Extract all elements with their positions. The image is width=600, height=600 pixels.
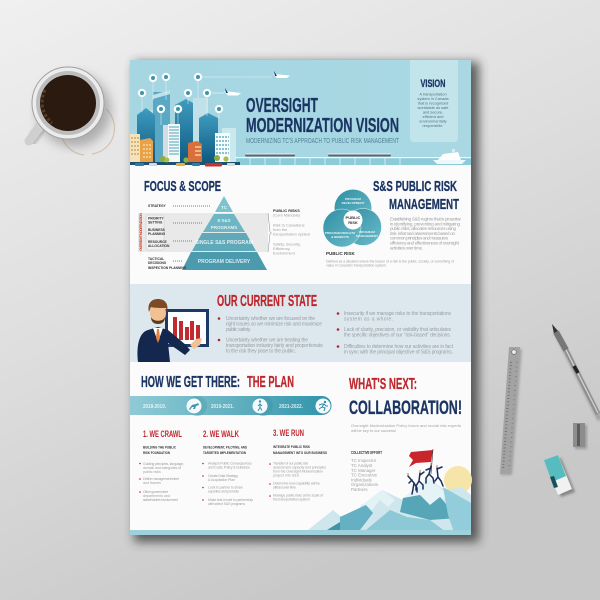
timeline: 2021-2022. — [279, 404, 303, 410]
bullets: current state left — [218, 316, 323, 354]
illustration: elevated rail bridge — [235, 154, 471, 165]
pyramid chart: 8 S&S — [217, 218, 231, 223]
labels: governance levels: ALLOCATION — [148, 244, 170, 248]
text: public risk definition: Defined as a situation where the bearer of a risk is the public, society, or something of — [326, 260, 454, 264]
labels: governance levels: PLANNING — [148, 232, 166, 236]
column: we walk: TARGETED IMPLEMENTATION — [203, 450, 246, 455]
panel: vision — [410, 60, 458, 142]
column: we crawl: Other government — [143, 490, 168, 494]
text: vision statement: system in Canada — [417, 96, 449, 101]
bracket — [268, 213, 272, 252]
labels: governance levels: RESOURCE — [148, 240, 167, 244]
icon: airplane lower — [212, 88, 241, 96]
icon: crawl — [186, 396, 207, 416]
heading: vision: VISION — [420, 78, 446, 90]
text: collective effort: Individuals — [351, 477, 373, 482]
text: regime description: common principles and measures — [390, 236, 449, 241]
pyramid chart — [182, 196, 267, 270]
text: public risk definition — [326, 251, 454, 268]
venn diagram: PROGRAM — [359, 230, 375, 234]
arrows: dashed connectors — [173, 206, 210, 261]
subtitle: MODERNIZING TC'S APPROACH TO PUBLIC RISK MANAGEMENT — [246, 136, 399, 145]
heading: s&s public risk management: S&S PUBLIC RISK — [373, 178, 457, 195]
column: we walk: Make test model in partnership — [208, 498, 253, 502]
climbers — [407, 463, 443, 494]
column: we run: Manage public risks at the scale of — [273, 494, 323, 498]
bullets: current state left: Uncertainty whether we are treating the — [226, 338, 308, 344]
text: vision statement: responsible. — [423, 123, 443, 128]
band: oversight scope — [138, 213, 268, 252]
text: vision statement: worldwide as safe — [418, 105, 448, 110]
bullets: current state right: system as a whole. — [344, 316, 393, 322]
column: we run: MANAGEMENT INTO OUR BUSINESS — [273, 450, 327, 455]
heading: what's next: WHAT'S NEXT: — [349, 376, 417, 393]
labels: governance levels — [146, 204, 187, 270]
title: OVERSIGHT — [246, 95, 318, 117]
poster shadow — [134, 62, 479, 542]
bullets: current state right — [337, 311, 454, 356]
labels: governance levels: STRATEGY — [148, 204, 167, 208]
labels: governance levels: PRIORITY — [148, 216, 164, 220]
flag — [409, 449, 433, 474]
text: collective effort — [351, 450, 382, 492]
text: vision statement: that is recognized — [418, 100, 448, 106]
bullets: current state left: Uncertainty whether we are focused on the — [226, 316, 315, 322]
object: sharpener — [573, 423, 587, 449]
text: regime description: Establishing S&S regime that is proactive — [390, 216, 461, 222]
heading: how we get there: HOW WE GET THERE: — [141, 374, 240, 391]
labels: governance levels: INSPECTION PLANNING — [148, 266, 187, 270]
illustration: presenter at board — [137, 299, 209, 362]
column: we walk: Analyze Public Consequences — [208, 462, 252, 466]
column: we crawl: Guiding principles, language, — [143, 462, 184, 466]
timeline — [130, 396, 332, 416]
venn diagram: DEVELOPMENT — [342, 201, 365, 205]
text: public risks: Environment — [273, 250, 296, 256]
column: we run: INTEGRATE PUBLIC RISK — [273, 444, 310, 449]
poster — [130, 60, 472, 535]
column: we crawl: domain and categories of — [143, 466, 181, 470]
vertical label: oversight modernization: OVERSIGHT MODERNIZATION — [139, 213, 143, 251]
venn diagram: RISK — [348, 220, 358, 225]
text: public risk definition: value in Canada's transportation system. — [326, 264, 387, 268]
icon network — [138, 73, 272, 125]
text: collective effort: Organizations — [351, 482, 379, 487]
icon: walk — [252, 396, 273, 416]
heading: s&s public risk management — [373, 178, 459, 213]
column: we run: the transportation system — [273, 498, 310, 502]
text: collective effort: TC Executive — [351, 473, 378, 478]
object: ruler — [500, 347, 522, 475]
bullets: current state left: transportation industry fairly and proportionate — [226, 343, 323, 349]
text: public risks: from the — [273, 227, 287, 232]
column: we run: Determine how capability will be — [273, 482, 320, 486]
column: we crawl: stakeholders involvement — [143, 498, 178, 502]
labels: governance levels: DECISIONS — [148, 261, 167, 265]
column: we run: project into S&S — [273, 474, 300, 478]
icon: ferry — [433, 149, 466, 164]
text: regime description: public risks; allocates resources using — [390, 226, 456, 231]
text: public risks: (Core Mandate) — [273, 212, 301, 218]
column: we walk: & Acquisition Plan — [208, 478, 235, 482]
bullets: current state right: in sync with the principal objective of S&S programs. — [344, 350, 453, 356]
panel: header banner — [130, 60, 471, 166]
panel: focus and scope — [138, 179, 310, 270]
text: forum note: will be key to our success! — [351, 428, 396, 433]
illustration: mountains and climbers — [308, 449, 472, 535]
venn diagram: PROGRAM — [345, 197, 361, 201]
text: regime description: activities over time. — [390, 245, 423, 250]
heading: collaboration: COLLABORATION! — [349, 398, 462, 419]
venn diagram — [323, 190, 382, 247]
bullets: current state left: public safety. — [226, 327, 251, 333]
labels: governance levels: BUSINESS — [148, 228, 166, 232]
column: we run: Transfer of our public risk — [273, 462, 308, 466]
column: we walk: expertise and promote — [208, 490, 239, 494]
text: regime description: efficiency and effectiveness of oversight — [390, 240, 460, 246]
text: vision statement: efficient and — [423, 114, 443, 119]
column: we run: 3. WE RUN — [273, 428, 304, 438]
column: we crawl: RISK FOUNDATION — [143, 450, 170, 455]
illustration: city skyline — [130, 73, 272, 166]
column: we walk: Look to partner to share — [208, 486, 243, 490]
venn diagram: PUBLIC — [346, 215, 361, 220]
panel: the plan — [130, 374, 332, 506]
column: we run — [269, 428, 327, 502]
column: we crawl — [139, 429, 184, 502]
column: we crawl: departments and — [143, 494, 170, 498]
venn diagram: PROGRAM RESULTS — [325, 231, 355, 235]
cars and trees — [135, 155, 235, 166]
object: coffee cup — [29, 67, 115, 155]
pyramid chart: SINGLE S&S PROGRAM — [195, 240, 253, 246]
pyramid chart: PROGRAM DELIVERY — [198, 259, 251, 265]
bullets: current state right: the specific objectives of our "risk-based" decisions. — [344, 332, 451, 338]
bullets: current state right: Difficulties to determine how our activities are in fact — [344, 344, 454, 350]
text: vision statement: environmentally — [419, 118, 447, 124]
icon: run — [316, 398, 330, 414]
text: vision statement: A transportation — [419, 92, 447, 96]
bullets: current state right: Lack of clarity, precision, or visibility that articulates — [344, 327, 452, 333]
venn diagram: & BENEFITS — [331, 235, 349, 239]
text: public risks: Risk to Canadians — [273, 222, 305, 228]
venn diagram: MANAGEMENT — [356, 234, 378, 238]
timeline: 2018-2019. — [143, 404, 166, 410]
pyramid chart: TC — [221, 205, 228, 210]
column: we run: from the Oversight Modernization — [273, 470, 323, 474]
text: public risks: PUBLIC RISKS — [273, 209, 300, 213]
bullets: current state left: right issues so we minimize risk and maximize — [226, 322, 322, 328]
icon: airplane top — [273, 71, 290, 78]
column: we crawl: Define management intent — [143, 477, 179, 481]
panel: our current state — [130, 284, 471, 362]
text: public risks: Safety, Security, — [273, 242, 301, 246]
column: we walk: 2. WE WALK — [203, 429, 239, 439]
text: public risk definition: PUBLIC RISK — [326, 251, 356, 256]
bullets: current state right: Insecurity if we manage risks to the transportations — [344, 311, 452, 317]
panel: what's next — [349, 376, 462, 492]
text: public risks: Efficiency, — [273, 246, 290, 251]
column: we walk: with select S&S programs — [208, 502, 245, 506]
text: vision statement: and secure, — [423, 110, 443, 114]
heading: how we get there: THE PLAN — [247, 374, 294, 391]
coffee stain ring — [61, 109, 115, 155]
column: we crawl: BUILDING THE PUBLIC — [143, 444, 176, 450]
title — [246, 95, 399, 145]
text: collective effort: COLLECTIVE EFFORT — [351, 450, 382, 455]
column: we crawl: public risks — [143, 470, 161, 474]
column: we walk — [202, 429, 253, 506]
column: we walk: DEVELOPMENT, PILOTING, AND — [203, 444, 247, 450]
object: eraser — [544, 455, 575, 497]
column: we run: utilized over time — [273, 486, 296, 490]
column: we walk: and Costs, Policy & Guidance — [208, 466, 250, 470]
title: MODERNIZATION VISION — [246, 115, 399, 137]
labels: governance levels: TACTICAL — [148, 257, 164, 261]
column: we crawl: and frames — [143, 481, 161, 485]
bullets: current state left: to the risk they pose to the public. — [226, 348, 296, 354]
column: we run: assessment capacity and principles — [273, 466, 326, 470]
text: regime description: in identifying, preventing and mitigating — [390, 221, 460, 226]
text: public risks: transportation system — [273, 232, 310, 236]
panel: s&s public risk management — [323, 178, 461, 268]
pyramid chart: PROGRAMS — [211, 225, 237, 230]
text: collective effort: TC Manager — [351, 468, 376, 473]
footer band — [130, 530, 471, 535]
text: regime description: risk- informed assessments based on — [390, 231, 455, 236]
text: collective effort: TC Analyst — [351, 463, 373, 468]
text: collective effort: TC Inspector — [351, 458, 377, 463]
text: forum note: Oversight Modernization Policy forum and modal risk experts — [351, 423, 461, 428]
text: collective effort: Partners — [351, 487, 368, 492]
heading: focus and scope: FOCUS & SCOPE — [144, 179, 221, 195]
column: we crawl: 1. WE CRAWL — [143, 429, 182, 439]
heading: s&s public risk management: MANAGEMENT — [389, 196, 459, 213]
object: pen — [552, 324, 600, 420]
heading: our current state: OUR CURRENT STATE — [217, 293, 317, 310]
labels: governance levels: SETTING — [148, 220, 163, 224]
column: we walk: Create Data Strategy — [208, 474, 238, 478]
timeline: 2019-2021. — [211, 404, 234, 410]
text: public risks — [273, 209, 310, 256]
